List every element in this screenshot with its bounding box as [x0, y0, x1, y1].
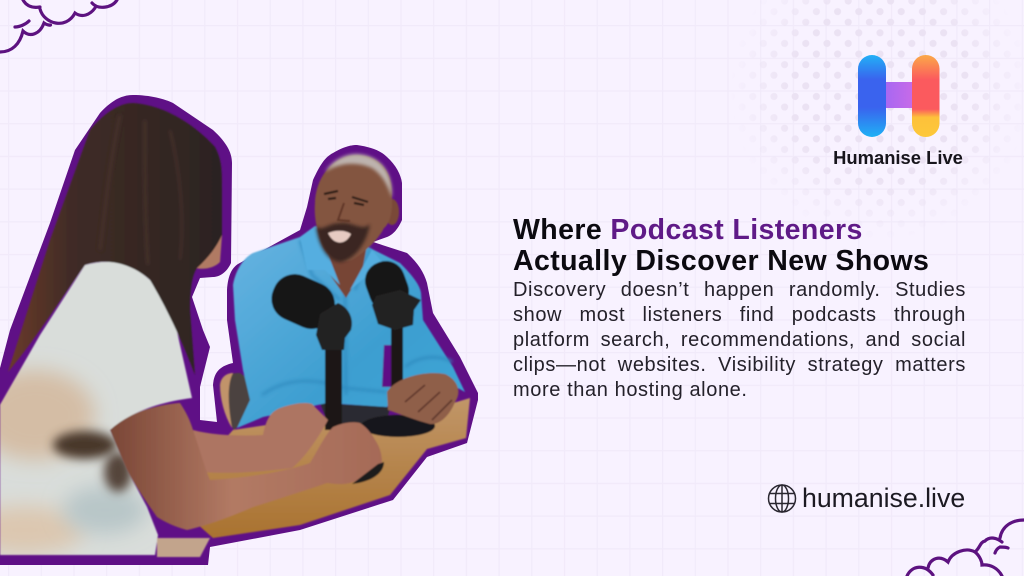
- heading: Actually Discover New Shows: [513, 245, 929, 277]
- cloud outline bottom right: [907, 520, 1024, 576]
- mouth: [328, 231, 351, 242]
- website address: humanise.live: [802, 483, 965, 513]
- peach lower area: [157, 538, 210, 557]
- woman's near arm: [110, 403, 382, 530]
- hair highlights: [100, 115, 182, 265]
- heading: Where Podcast Listeners: [513, 214, 863, 246]
- left mic mount: [316, 303, 352, 350]
- table: [170, 398, 470, 538]
- finger lines: [405, 385, 452, 420]
- logo mark: coloured H: [858, 55, 940, 137]
- logo wordmark: Humanise Live: [833, 147, 963, 168]
- nose: [338, 203, 350, 221]
- crossbar: [886, 82, 912, 108]
- left mic stand: [325, 345, 342, 430]
- chair: [220, 373, 250, 430]
- eyes and brows: [324, 191, 368, 205]
- body text: Discovery doesn’t happen randomly. Studies: [513, 279, 966, 301]
- dark table shadow under sleeve: [320, 403, 390, 430]
- neck: [322, 245, 367, 298]
- heading: [513, 214, 929, 277]
- body text: more than hosting alone.: [513, 379, 748, 401]
- dark shadow near arm: [104, 452, 132, 492]
- phone under hand: [352, 462, 384, 484]
- dark shadow: [53, 431, 117, 459]
- body text: [513, 279, 966, 401]
- purple gap beside mic stand: [382, 345, 392, 387]
- woman's shirt: [0, 255, 200, 560]
- collar: [300, 226, 382, 290]
- grey shaved hair: [325, 154, 392, 198]
- man's shirt: [233, 226, 465, 428]
- right mic mount: [372, 290, 421, 330]
- shirt folds: [262, 240, 452, 395]
- right mic capsule: [360, 256, 414, 316]
- body text: show most listeners find podcasts through: [513, 304, 966, 326]
- body text: platform search, recommendations, and social: [513, 329, 966, 351]
- beige patch: [0, 370, 95, 460]
- purple silhouette outline: [0, 95, 478, 565]
- beard: [316, 223, 370, 262]
- right mic stand: [391, 327, 403, 411]
- body text: clips—not websites. Visibility strategy matters: [513, 354, 966, 376]
- woman's far arm: [193, 403, 328, 473]
- soft photographic content: [0, 103, 470, 560]
- ear: [385, 199, 399, 225]
- photo cut-out: podcast host and guest: [0, 95, 478, 565]
- woman's neck: [190, 235, 222, 275]
- woman's hair: [8, 103, 222, 375]
- man's hand: [387, 373, 458, 424]
- cloud outline top left: [0, 0, 117, 52]
- left mic capsule: [264, 267, 342, 336]
- halftone dots behind logo: [762, 0, 1000, 210]
- lower grey-blue: [63, 486, 147, 534]
- right mic base: [361, 415, 435, 437]
- man's head: [315, 155, 392, 262]
- globe icon: [768, 485, 796, 512]
- lower beige band: [0, 506, 85, 554]
